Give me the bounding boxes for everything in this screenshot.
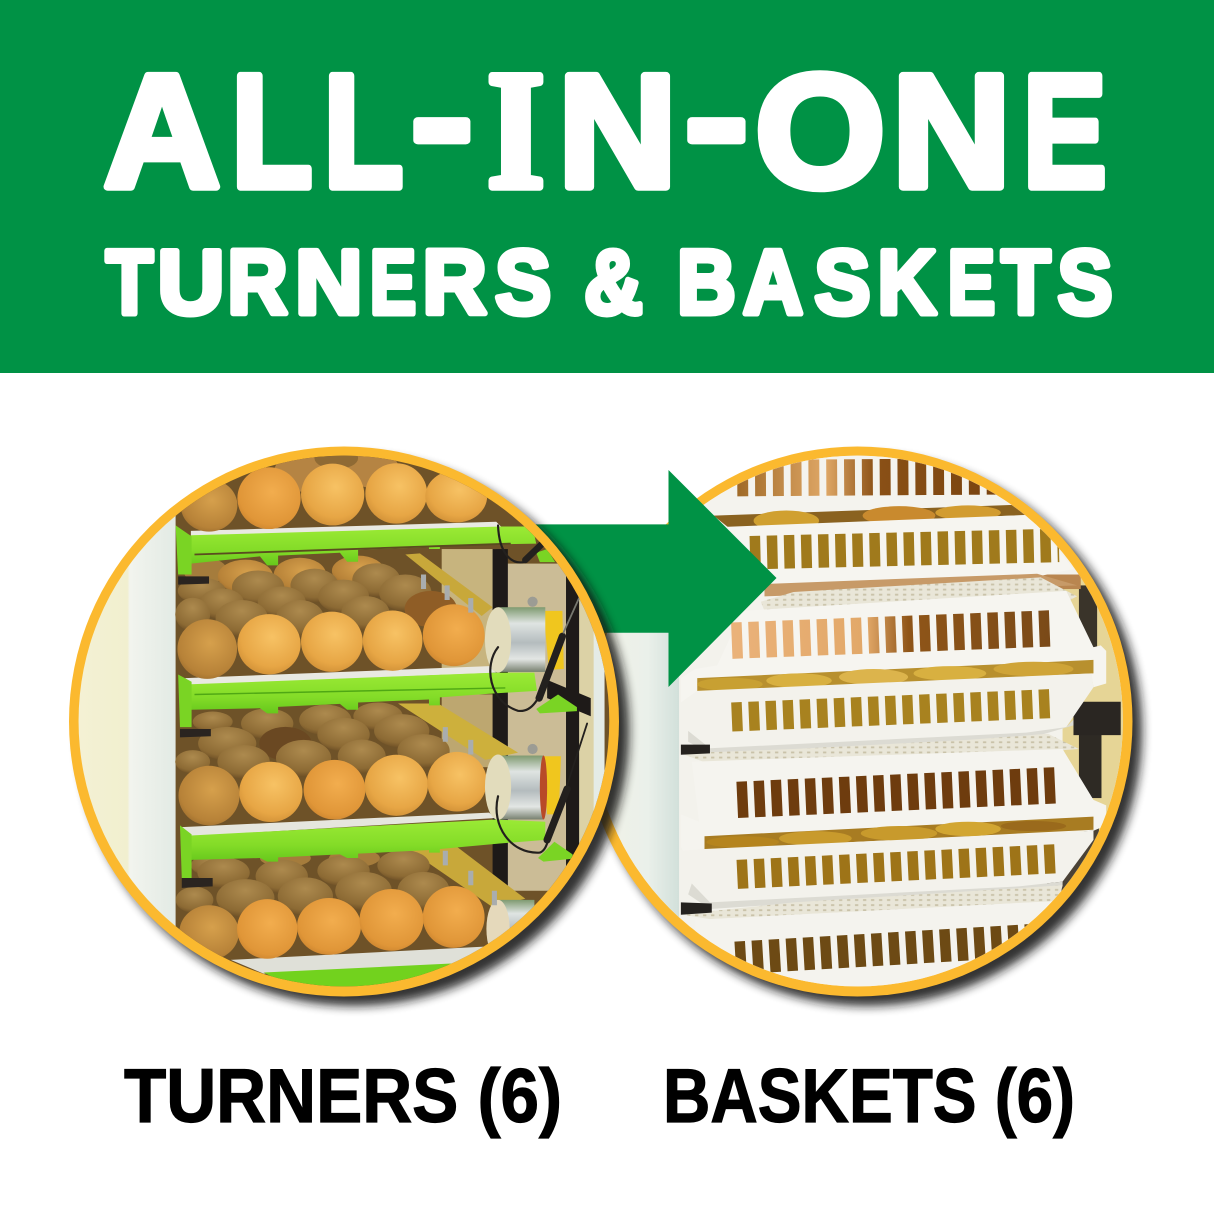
header band xyxy=(0,0,1214,373)
motor 1 xyxy=(485,597,564,673)
title: ALL-IN-ONE: L xyxy=(323,42,404,222)
basket C xyxy=(681,577,1106,753)
eggs row 1 xyxy=(181,447,487,532)
subtitle: TURNERS & BASKETS: S xyxy=(814,233,870,334)
subtitle: TURNERS & BASKETS: K xyxy=(878,233,936,334)
hooks row 2 xyxy=(424,575,471,613)
title: ALL-IN-ONE: N xyxy=(892,42,1011,222)
basket G xyxy=(681,885,1063,996)
subtitle: TURNERS & BASKETS: E xyxy=(370,233,416,334)
basket row A xyxy=(704,456,1028,527)
subtitle: TURNERS & BASKETS: N xyxy=(295,233,363,334)
title: ALL-IN-ONE: L xyxy=(231,42,313,222)
basket E xyxy=(681,734,1106,909)
eggs row 4 xyxy=(176,849,485,960)
subtitle: TURNERS & BASKETS: E xyxy=(948,233,995,334)
shelf 1 xyxy=(176,522,555,585)
title: ALL-IN-ONE: I xyxy=(487,36,545,224)
subtitle: TURNERS & BASKETS: R xyxy=(422,233,487,334)
subtitle: TURNERS & BASKETS: T xyxy=(106,233,153,334)
panel: baskets photo circle xyxy=(582,440,1160,1010)
foam brackets xyxy=(681,745,712,915)
title: ALL-IN-ONE: - xyxy=(684,28,748,208)
motor 3 xyxy=(486,900,534,944)
title: ALL-IN-ONE: - xyxy=(411,28,473,208)
title: ALL-IN-ONE xyxy=(104,28,1107,224)
yellow turning rail, row 2 xyxy=(405,553,493,616)
title: ALL-IN-ONE: E xyxy=(1023,42,1107,222)
subtitle: TURNERS & BASKETS: & xyxy=(584,233,642,334)
label: baskets: BASKETS (6) xyxy=(663,1054,1075,1139)
title: ALL-IN-ONE: A xyxy=(104,42,220,222)
bottom shelf xyxy=(231,946,484,986)
subtitle: TURNERS & BASKETS: U xyxy=(158,233,224,334)
subtitle: TURNERS & BASKETS: S xyxy=(1058,233,1112,334)
eggs row 2 xyxy=(175,556,485,679)
shelf 3 xyxy=(180,813,573,888)
shelf 2 xyxy=(178,666,577,737)
motor 2 xyxy=(485,744,561,820)
basket row B xyxy=(715,515,1077,596)
subtitle: TURNERS & BASKETS: R xyxy=(228,233,288,334)
yellow turning rail, row 4 xyxy=(412,847,526,906)
eggs row 3 xyxy=(175,702,487,825)
panel: turners photo circle xyxy=(60,440,629,1010)
label: turners: TURNERS (6) xyxy=(124,1054,562,1139)
subtitle: TURNERS & BASKETS: S xyxy=(495,233,551,334)
hooks row 3 xyxy=(445,727,494,905)
back panels and posts xyxy=(442,549,605,891)
arrow xyxy=(500,470,776,687)
yellow turning rail, row 3 xyxy=(398,704,518,760)
subtitle: TURNERS & BASKETS: B xyxy=(677,233,736,334)
cables xyxy=(490,525,587,853)
title: ALL-IN-ONE: N xyxy=(558,42,677,222)
subtitle: TURNERS & BASKETS xyxy=(106,233,1112,334)
title: ALL-IN-ONE: O xyxy=(755,42,885,222)
subtitle: TURNERS & BASKETS: A xyxy=(743,233,803,334)
subtitle: TURNERS & BASKETS: T xyxy=(1001,233,1050,334)
